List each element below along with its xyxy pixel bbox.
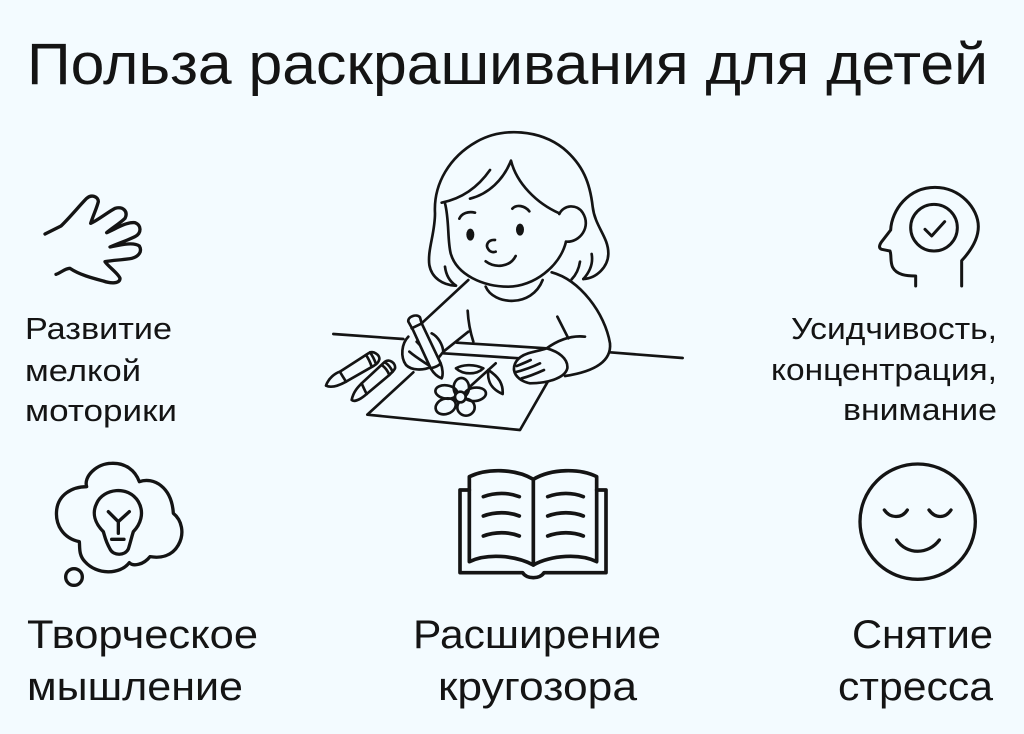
icon: thought bubble with light bulb: [56, 463, 182, 585]
body and arms: [422, 272, 610, 376]
label: creative thinking: [27, 613, 258, 709]
label: fine motor skills: моторики: [25, 393, 177, 428]
crayon in hand: [408, 316, 443, 378]
illustration: girl colouring a flower: [326, 132, 683, 430]
label: attention and concentration: внимание: [843, 392, 997, 427]
label: fine motor skills: мелкой: [25, 353, 141, 388]
label: attention and concentration: концентрация,: [771, 352, 997, 387]
hair: [429, 132, 608, 286]
label: broadening horizons: кругозора: [438, 665, 638, 709]
label: broadening horizons: Расширение: [413, 613, 661, 657]
table edges: [333, 334, 683, 358]
left hand: [402, 333, 443, 369]
paper sheet: [367, 372, 548, 430]
icon: open book: [460, 471, 606, 578]
label: stress relief: [838, 613, 994, 709]
label: stress relief: стресса: [838, 665, 994, 709]
label: attention and concentration: Усидчивость,: [791, 311, 997, 346]
label: stress relief: Снятие: [852, 613, 993, 657]
title: Польза раскрашивания для детей: [27, 32, 988, 97]
label: broadening horizons: [413, 613, 661, 709]
flower drawing: [433, 363, 503, 417]
loose crayons: [326, 352, 395, 401]
label: attention and concentration: [771, 311, 997, 427]
label: fine motor skills: Развитие: [25, 311, 172, 346]
label: fine motor skills: [25, 311, 177, 428]
right hand: [514, 348, 567, 383]
label: creative thinking: Творческое: [27, 613, 258, 657]
icon: hand: [45, 196, 140, 283]
icon: calm smiling face: [860, 464, 975, 579]
label: creative thinking: мышление: [27, 665, 243, 709]
face: [445, 203, 586, 287]
icon: head with check mark: [880, 187, 978, 286]
